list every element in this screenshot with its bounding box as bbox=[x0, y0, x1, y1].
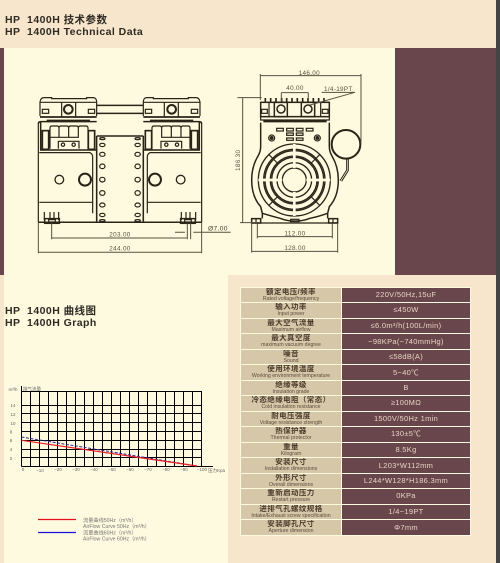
row: overall dimensions bbox=[241, 474, 470, 488]
row: aperture dimension bbox=[241, 520, 470, 535]
row: thermal protector: 130±5℃ bbox=[391, 429, 421, 438]
x axis labels: −90 bbox=[180, 467, 188, 472]
centre frame with holes bbox=[38, 105, 202, 222]
row: maximum airflow bbox=[241, 319, 470, 333]
row: restart pressure: Restart pressure bbox=[272, 497, 310, 503]
y axis labels: 14 bbox=[10, 403, 16, 408]
row: voltage resistance: 1500V/50Hz 1min bbox=[374, 414, 438, 423]
pump unit left bbox=[38, 98, 97, 223]
left maroon strip bbox=[0, 48, 4, 275]
row: input power: ≤450W bbox=[393, 305, 419, 314]
row: rated voltage bbox=[241, 288, 470, 302]
feet bbox=[252, 219, 338, 223]
row: working temperature: Working environment temperature bbox=[252, 373, 330, 379]
row: maximum vacuum: maximum vacuum degree bbox=[261, 342, 321, 348]
row: restart pressure: 0KPa bbox=[396, 491, 416, 500]
row: overall dimensions: L244*W128*H186.3mm bbox=[364, 476, 448, 485]
dimensions: front view: Ø7.00 bbox=[208, 225, 228, 232]
row: cold insulation resistance bbox=[241, 396, 470, 411]
x axis labels: −60 bbox=[126, 467, 134, 472]
drawing: front view bbox=[38, 98, 231, 253]
vents and screws bbox=[269, 128, 320, 141]
heading: graph: HP 1400H 曲线图 HP 1400H Graph bbox=[5, 305, 97, 329]
row: aperture dimension: Aperture dimension bbox=[268, 528, 313, 534]
row: overall dimensions: Overall dimensions bbox=[269, 482, 313, 488]
row: rated voltage: Rated voltage/frequency bbox=[263, 296, 319, 302]
legend bbox=[38, 516, 150, 542]
right maroon panel bbox=[395, 48, 496, 275]
y axis labels bbox=[8, 387, 18, 461]
panel: drawing background bbox=[4, 48, 395, 275]
legend 60Hz: 流量曲线60Hz（m³/h） bbox=[83, 528, 137, 536]
fan grille bbox=[258, 144, 330, 216]
dimensions: side view bbox=[235, 70, 361, 253]
dimensions: side view: 112.00 bbox=[285, 230, 306, 237]
row: voltage resistance: Voltage resistance strength bbox=[260, 420, 322, 426]
legend 60Hz: AirFlow Curve 60Hz（m³/h） bbox=[83, 536, 150, 542]
motor body bbox=[252, 123, 338, 221]
legend 50Hz bbox=[38, 516, 150, 530]
right edge strip bbox=[496, 0, 500, 563]
row: maximum airflow: Maximum airflow bbox=[272, 327, 310, 333]
x axis labels: −80 bbox=[162, 467, 170, 472]
row: installation dimensions: L203*W112mm bbox=[379, 461, 433, 470]
dimensions: front view: 203.00 bbox=[109, 232, 131, 239]
y axis labels: 6 bbox=[10, 438, 13, 443]
row: kilogram: Kilogram bbox=[281, 451, 301, 457]
heading: technical data: HP 1400H 技术参数 HP 1400H Technical Data bbox=[5, 14, 143, 38]
blue curve 60Hz bbox=[22, 437, 197, 466]
panel: graph background bbox=[4, 275, 228, 563]
dimensions: side view: 40.00 bbox=[286, 85, 304, 92]
pump unit right bbox=[143, 98, 202, 223]
row: cold insulation resistance: Cold insulation resistance bbox=[261, 404, 321, 410]
chart grid bbox=[22, 386, 213, 466]
dimensions: side view: 1/4-19PT bbox=[324, 86, 353, 93]
row: input power: Input power bbox=[277, 311, 305, 317]
row: restart pressure bbox=[241, 489, 470, 504]
row: input power bbox=[241, 303, 470, 318]
axis title: pressure: 压力Kpa bbox=[208, 467, 226, 474]
row: rated voltage: 220V/50Hz,15uF bbox=[376, 290, 436, 299]
row: working temperature: 5−40℃ bbox=[393, 368, 419, 377]
row: working temperature bbox=[241, 365, 470, 380]
y axis labels: 12 bbox=[10, 412, 16, 417]
axis title: flow: 排气流量 bbox=[23, 386, 41, 392]
y axis labels: 10 bbox=[10, 421, 16, 426]
x axis labels: −20 bbox=[54, 467, 62, 472]
x axis labels: −50 bbox=[108, 467, 116, 472]
row: thermal protector: Thermal protector bbox=[271, 435, 311, 441]
row: maximum vacuum bbox=[241, 334, 470, 349]
row: maximum airflow: ≤6.0m³/h(100L/min) bbox=[371, 321, 441, 330]
x axis labels: −40 bbox=[90, 467, 98, 472]
row: kilogram bbox=[241, 443, 470, 457]
row: intake exhaust screw: Intake/Exhaust screw specification bbox=[251, 513, 331, 519]
row: insulation grade bbox=[241, 381, 470, 395]
row: kilogram: 8.5Kg bbox=[395, 445, 417, 454]
x axis labels: −30 bbox=[72, 467, 80, 472]
row: installation dimensions bbox=[241, 458, 470, 473]
x axis labels: −100 bbox=[197, 467, 208, 472]
x axis labels: −10 bbox=[36, 468, 44, 473]
red curve 50Hz bbox=[22, 440, 197, 466]
legend 60Hz bbox=[38, 528, 150, 542]
x axis labels: 0 bbox=[22, 467, 25, 472]
legend 50Hz: AirFlow Curve 50Hz（m³/h） bbox=[83, 523, 150, 530]
row: intake exhaust screw bbox=[241, 505, 470, 519]
row: installation dimensions: Installation dimensions bbox=[265, 466, 317, 472]
drawing: side view bbox=[235, 70, 361, 253]
y axis labels: 8 bbox=[10, 430, 13, 434]
y axis labels: 2 bbox=[10, 456, 13, 461]
row: intake exhaust screw: 1/4−19PT bbox=[388, 507, 424, 516]
row: sound: ≤58dB(A) bbox=[389, 352, 423, 361]
y axis labels: 4 bbox=[10, 447, 13, 452]
row: sound: Sound bbox=[283, 358, 298, 364]
row: voltage resistance bbox=[241, 412, 470, 426]
legend 50Hz: 流量曲线50Hz（m³/h） bbox=[83, 516, 137, 524]
dimensions: side view: 128.00 bbox=[284, 245, 306, 252]
line chart: airflow curve bbox=[8, 386, 226, 474]
head block bbox=[261, 98, 329, 121]
dimensions: front view: 244.00 bbox=[109, 246, 131, 253]
row: insulation grade: Insulation grade bbox=[273, 389, 309, 395]
dimensions: side view: 146.00 bbox=[299, 70, 320, 77]
row: thermal protector bbox=[241, 427, 470, 442]
row: aperture dimension: Φ7mm bbox=[394, 523, 418, 532]
spec table bbox=[240, 287, 471, 536]
row: maximum vacuum: −98KPa(−740mmHg) bbox=[368, 337, 444, 346]
dimensions: side view: 186.30 bbox=[235, 149, 242, 171]
row: insulation grade: B bbox=[403, 383, 409, 392]
dimensions: front view bbox=[38, 222, 231, 253]
row: sound bbox=[241, 350, 470, 364]
x axis labels bbox=[22, 467, 208, 473]
capacitor bbox=[332, 130, 360, 181]
y axis labels: m³/h bbox=[8, 387, 18, 392]
x axis labels: −70 bbox=[144, 467, 152, 472]
row: cold insulation resistance: ≥100MΩ bbox=[391, 398, 421, 407]
